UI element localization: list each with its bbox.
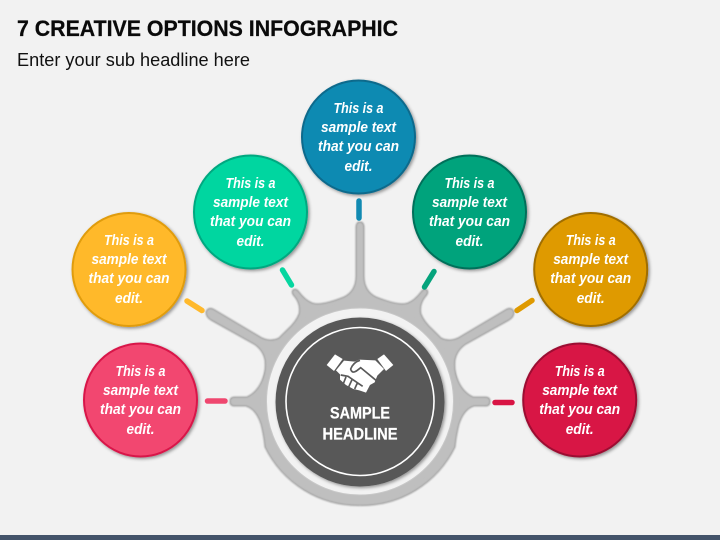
option 2: yellow circle: edit.: [115, 290, 143, 307]
connector hub with branches: [206, 222, 514, 506]
dash connectors: [187, 201, 532, 402]
option 3: green circle: [194, 156, 307, 268]
option 6: amber circle: [534, 213, 647, 326]
footer bar: [0, 535, 720, 540]
option 4: blue circle: edit.: [344, 158, 372, 175]
option 6: amber circle: that you can: [550, 270, 631, 287]
option 4: blue circle: This is a: [334, 100, 384, 117]
option 2: yellow circle: sample text: [92, 251, 167, 268]
option 4: blue circle: sample text: [321, 119, 397, 136]
option 1: pink circle: This is a: [116, 363, 166, 380]
option 6: amber circle: This is a: [566, 232, 616, 249]
option 5: dark green circle: edit.: [456, 233, 484, 250]
option 3: green circle: that you can: [210, 213, 291, 230]
subtitle: Enter your sub headline here: [17, 50, 250, 70]
option 7: crimson circle: that you can: [539, 401, 620, 418]
option 6: amber circle: sample text: [553, 251, 629, 268]
option 7: crimson circle: edit.: [566, 421, 594, 438]
option 5: dark green circle: [413, 156, 526, 268]
option 7: crimson circle: sample text: [542, 382, 618, 399]
title: 7 CREATIVE OPTIONS INFOGRAPHIC: [17, 16, 398, 41]
central hub: [72, 80, 647, 495]
option 4: blue circle: [302, 80, 415, 194]
center label: HEADLINE: [322, 426, 398, 444]
option 3: green circle: This is a: [226, 175, 276, 192]
option 5: dark green circle: that you can: [429, 213, 510, 230]
option 1: pink circle: sample text: [103, 382, 179, 399]
option 1: pink circle: that you can: [100, 401, 181, 418]
option 5: dark green circle: This is a: [444, 175, 494, 192]
center label: [322, 404, 398, 444]
option 3: green circle: sample text: [213, 194, 289, 211]
option 5: dark green circle: sample text: [432, 194, 508, 211]
center label: SAMPLE: [330, 404, 390, 422]
option 7: crimson circle: This is a: [555, 363, 605, 380]
option 6: amber circle: edit.: [577, 290, 605, 307]
option 1: pink circle: edit.: [126, 421, 154, 438]
icon: handshake: [327, 354, 393, 393]
option 2: yellow circle: that you can: [88, 270, 170, 287]
option 2: yellow circle: [72, 213, 186, 326]
option 3: green circle: edit.: [236, 233, 264, 250]
option 2: yellow circle: This is a: [104, 232, 154, 249]
option 7: crimson circle: [523, 344, 636, 456]
option 4: blue circle: that you can: [318, 138, 399, 155]
option 1: pink circle: [84, 344, 197, 456]
